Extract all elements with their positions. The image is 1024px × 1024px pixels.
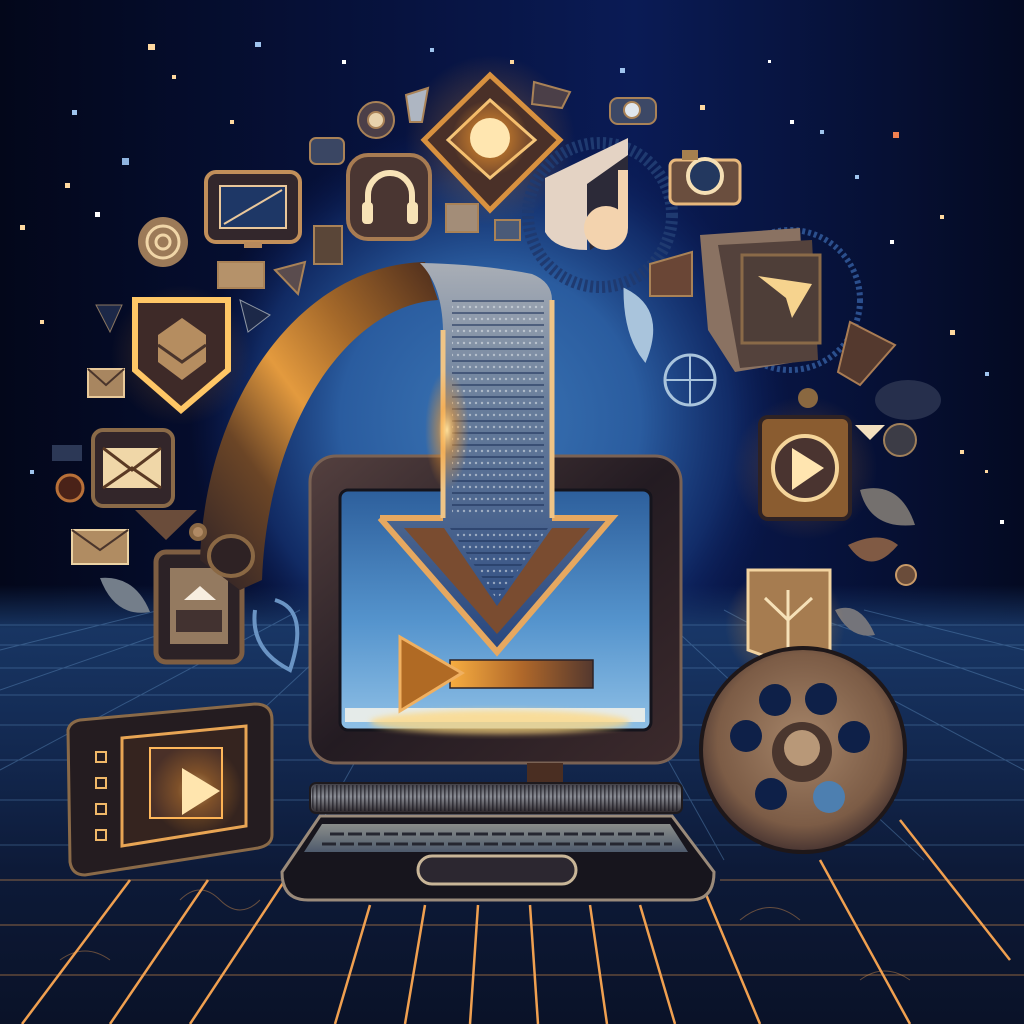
icon: decorative crescent emblem <box>625 290 715 405</box>
icon: cloud and leaves right <box>798 322 941 636</box>
arrow arc: curved band <box>200 262 438 590</box>
icon: leaf banner <box>725 565 845 685</box>
icon: headphones <box>348 155 430 239</box>
icon: warning triangle <box>135 510 197 540</box>
starfield particles <box>20 42 1004 524</box>
floor grid <box>0 585 1024 1024</box>
screen glow strip <box>345 708 645 722</box>
device play icon <box>182 768 220 815</box>
download arrow <box>380 263 612 652</box>
icon: clasp at arc end <box>191 525 253 576</box>
icon: shield <box>111 285 251 425</box>
keyboard hinge bar <box>310 783 682 813</box>
icon: envelope small <box>88 369 124 397</box>
video player device <box>68 704 272 875</box>
icon: stacked cards with arrow <box>700 228 860 372</box>
icon: play tile <box>733 396 877 540</box>
icon: small top emblems <box>218 82 692 296</box>
monitor <box>310 456 681 763</box>
icon: left small emblems <box>52 300 297 670</box>
device inner frame <box>122 726 246 846</box>
center glow behind monitor <box>190 120 790 720</box>
device film holes <box>96 752 106 840</box>
icon: diamond heart top <box>405 55 575 225</box>
icon: document tile <box>156 552 242 662</box>
monitor stand <box>527 763 563 785</box>
laptop keyboard base <box>282 816 714 900</box>
icon: music note tile <box>528 138 672 287</box>
icon: small envelope lower <box>72 530 128 564</box>
icon: envelope tile <box>93 430 173 506</box>
film reel <box>701 648 905 852</box>
progress play bar <box>370 637 630 734</box>
icon: target badge <box>138 217 188 267</box>
icon: monitor <box>206 172 300 248</box>
icon: camera <box>670 150 740 204</box>
monitor screen <box>340 490 651 730</box>
